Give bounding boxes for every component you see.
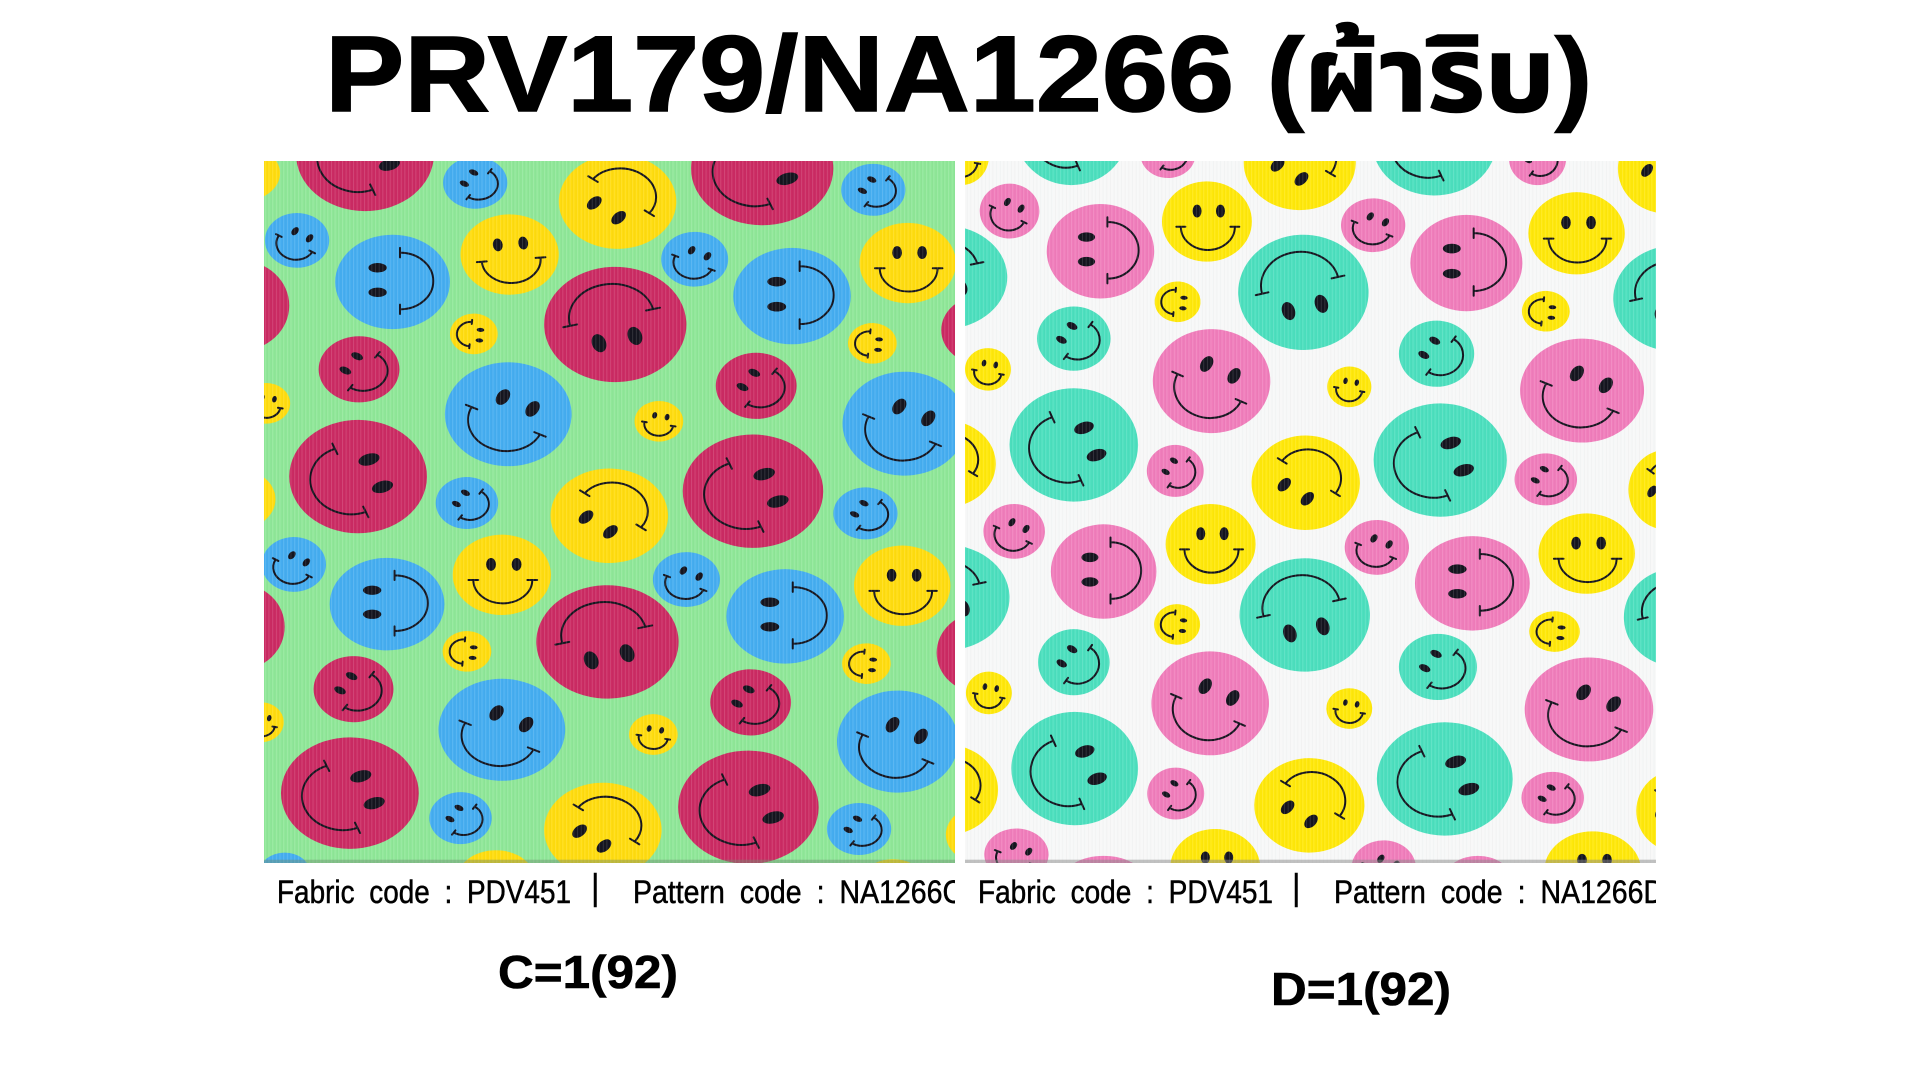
caption: swatch C fabric and pattern code <box>277 872 963 910</box>
label: D quantity: D=1(92) <box>1271 963 1451 1015</box>
caption: swatch D fabric and pattern code: Fabric code : PDV451 <box>978 874 1273 910</box>
title: (ผ้าริบ) <box>1267 18 1592 134</box>
title: PRV179/NA1266 <box>325 13 1234 134</box>
title <box>325 13 1592 134</box>
panel: fabric swatch D, white background <box>965 161 1656 863</box>
caption: swatch C fabric and pattern code: Fabric code : PDV451 <box>277 874 571 910</box>
caption: swatch D fabric and pattern code <box>978 872 1664 910</box>
label: C quantity: C=1(92) <box>498 946 678 998</box>
panel: fabric swatch C, green background <box>264 161 955 863</box>
